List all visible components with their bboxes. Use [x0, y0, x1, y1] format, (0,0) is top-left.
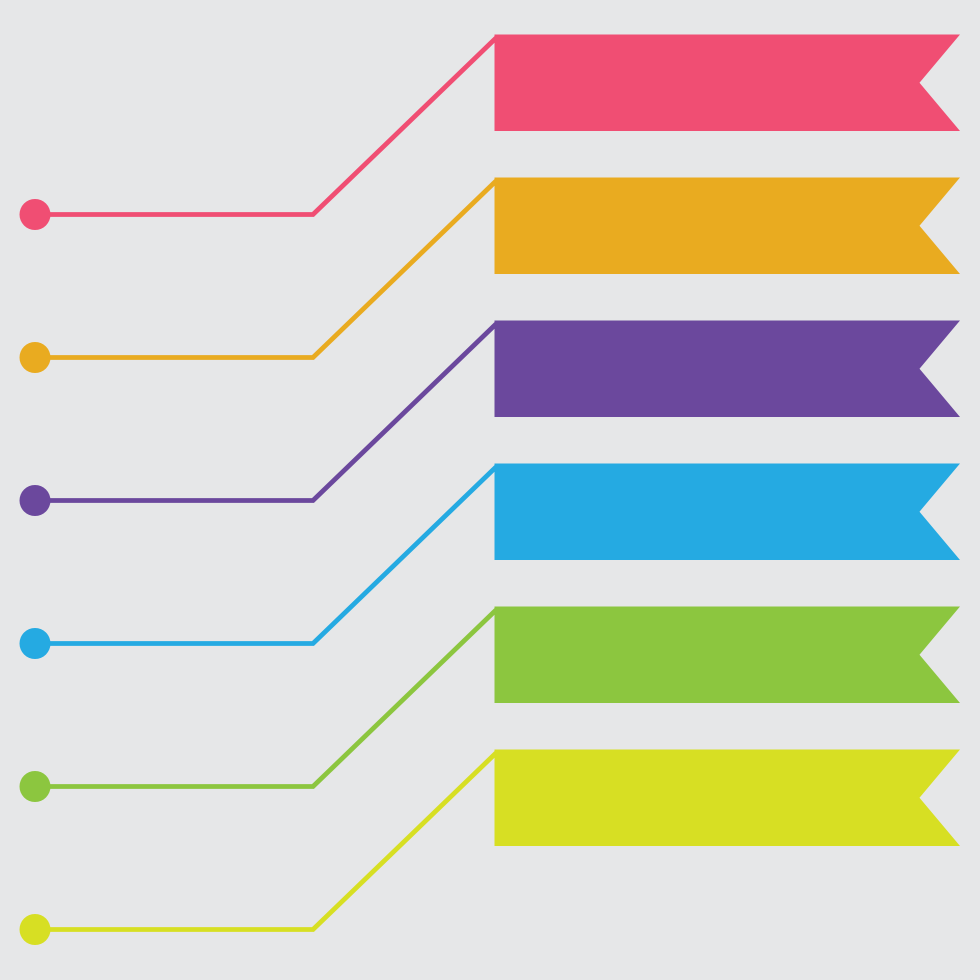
row 1: pink banner with connector — [20, 34, 960, 230]
pink connector line — [35, 38, 496, 214]
green connector line — [35, 610, 496, 786]
row 2: orange banner with connector — [20, 178, 960, 373]
orange ribbon banner — [494, 178, 960, 274]
row 3: purple banner with connector — [20, 320, 960, 516]
row 6: lime banner with connector — [20, 750, 960, 945]
pink ribbon banner — [494, 34, 960, 131]
green ribbon banner — [494, 606, 960, 703]
blue connector line — [35, 467, 496, 644]
pink dot — [20, 199, 50, 230]
blue dot — [20, 628, 50, 659]
green dot — [20, 771, 50, 802]
orange connector line — [35, 181, 496, 358]
blue ribbon banner — [494, 464, 960, 560]
purple connector line — [35, 324, 496, 500]
lime dot — [20, 914, 50, 945]
purple dot — [20, 485, 50, 516]
row 5: green banner with connector — [20, 606, 960, 802]
purple ribbon banner — [494, 320, 960, 417]
orange dot — [20, 342, 50, 373]
lime ribbon banner — [494, 750, 960, 846]
row 4: blue banner with connector — [20, 464, 960, 659]
lime connector line — [35, 753, 496, 930]
